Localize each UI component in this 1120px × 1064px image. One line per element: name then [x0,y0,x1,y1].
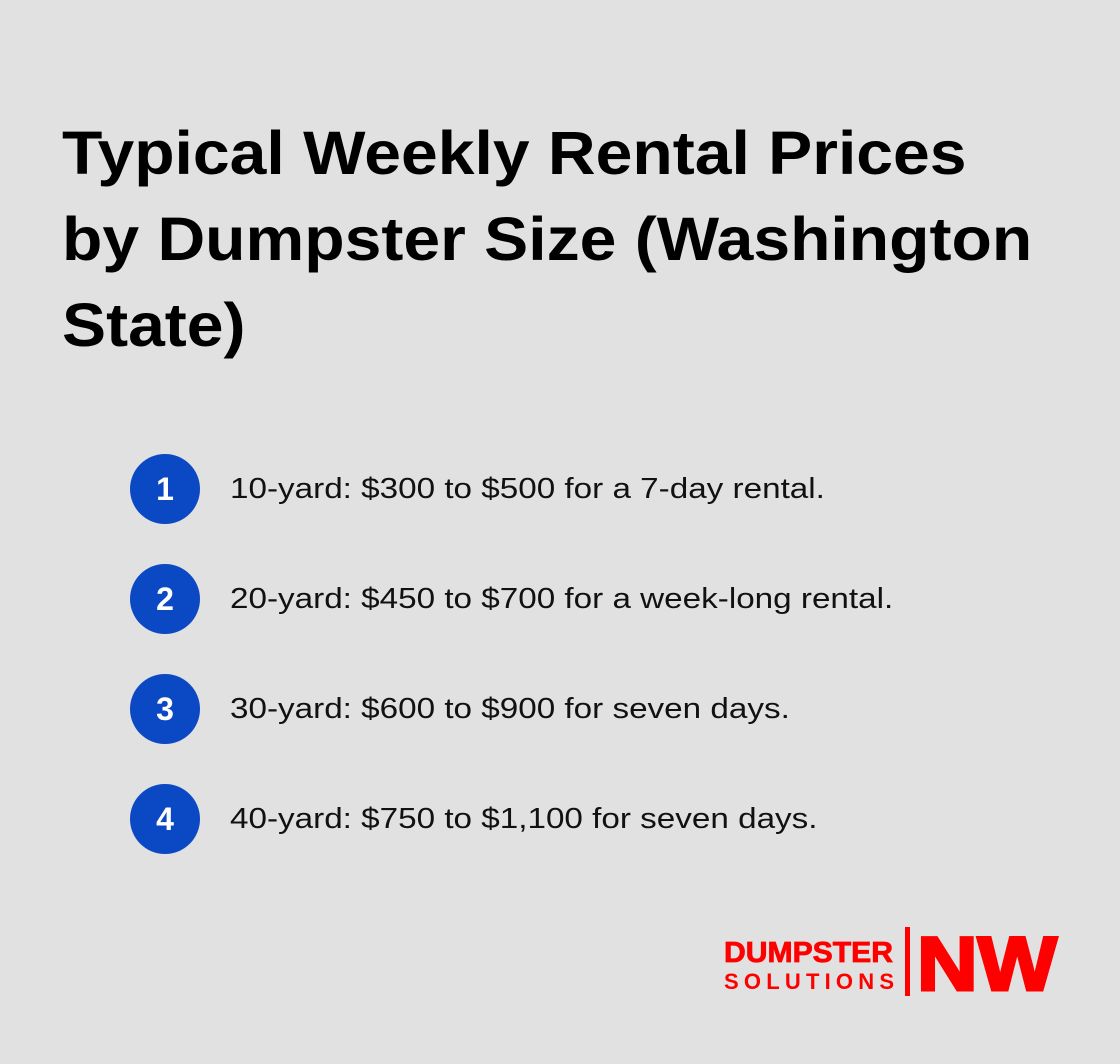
list item 3: 30-yard: $600 to $900 for seven days. [230,693,790,725]
logo [724,926,1059,998]
title: by Dumpster Size (Washington [62,205,1032,273]
list item 4 [130,784,818,854]
title [62,119,1032,359]
number badge 1 [130,454,200,524]
number badge 3 [130,674,200,744]
logo: SOLUTIONS [724,969,894,994]
number badge 4: 4 [156,801,174,837]
list item 1: 10-yard: $300 to $500 for a 7-day rental. [230,473,825,505]
title: Typical Weekly Rental Prices [62,119,967,187]
list item 2: 20-yard: $450 to $700 for a week-long rental. [230,583,893,615]
list item 1 [130,454,825,524]
number badge 2 [130,564,200,634]
logo: DUMPSTER [724,937,893,969]
list item 4: 40-yard: $750 to $1,100 for seven days. [230,803,818,835]
list item 3 [130,674,790,744]
list item 2 [130,564,893,634]
number badge 2: 2 [156,581,174,617]
number badge 1: 1 [156,471,174,507]
title: State) [62,291,246,359]
number badge 3: 3 [156,691,174,727]
number badge 4 [130,784,200,854]
